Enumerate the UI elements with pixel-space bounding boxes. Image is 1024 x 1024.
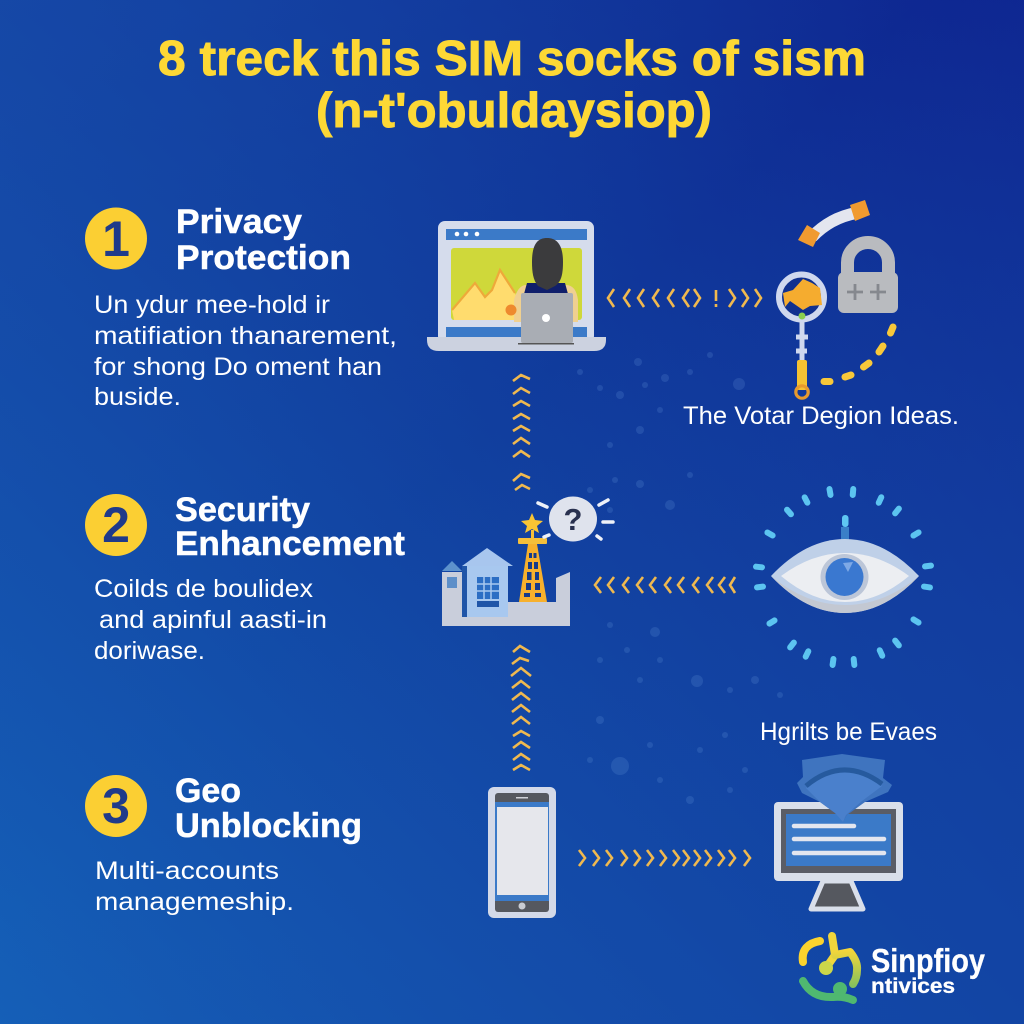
number badge 1: 1 bbox=[102, 211, 130, 267]
text block: security: Coilds de boulidex bbox=[94, 575, 314, 603]
text block: security bbox=[94, 575, 327, 665]
text block: geo bbox=[95, 857, 294, 916]
caption: highlights: Hgrilts be Evaes bbox=[760, 718, 937, 746]
icon: building, tower and question bubble bbox=[442, 496, 613, 626]
heading: geo unblocking: Unblocking bbox=[175, 807, 362, 845]
heading: privacy protection bbox=[176, 203, 351, 277]
logo bbox=[803, 936, 986, 1000]
icon: building, tower and question bubble: ? bbox=[564, 502, 582, 537]
heading: security enhancement: Security bbox=[175, 491, 310, 529]
heading: security enhancement: Enhancement bbox=[175, 525, 405, 563]
icon: padlock with magnifier key bbox=[779, 200, 898, 398]
title bbox=[158, 32, 866, 138]
text block: privacy: matifiation thanarement, bbox=[94, 322, 397, 350]
icon: smartphone bbox=[488, 787, 556, 918]
logo text: Sinpfioy bbox=[871, 942, 986, 979]
number badge 1 bbox=[85, 208, 147, 270]
icon: monitor with shield bbox=[774, 754, 903, 909]
logo text bbox=[871, 942, 986, 998]
heading: geo unblocking bbox=[175, 772, 362, 845]
heading: privacy protection: Protection bbox=[176, 239, 351, 277]
panel: geo unblocking bbox=[85, 772, 362, 916]
title: 8 treck this SIM socks of sism bbox=[158, 32, 866, 86]
text block: privacy bbox=[94, 291, 397, 411]
text block: geo: Multi-accounts bbox=[95, 857, 279, 885]
text block: privacy: Un ydur mee-hold ir bbox=[94, 291, 330, 319]
number badge 2: 2 bbox=[102, 497, 130, 553]
text block: privacy: buside. bbox=[94, 383, 181, 411]
icon: laptop with person bbox=[427, 221, 606, 351]
caption: voter region: The Votar Degion Ideas. bbox=[683, 402, 959, 430]
arrow: chevrons eye to building bbox=[595, 577, 735, 593]
panel: privacy protection bbox=[85, 203, 397, 411]
heading: security enhancement bbox=[175, 491, 405, 563]
arrow: chevrons phone to monitor bbox=[579, 850, 750, 866]
arrow: chevrons up from phone to building bbox=[511, 646, 531, 770]
title: (n-t'obuldaysiop) bbox=[316, 84, 712, 138]
number badge 3 bbox=[85, 775, 147, 837]
text block: security: and apinful aasti-in bbox=[99, 606, 327, 634]
heading: privacy protection: Privacy bbox=[176, 203, 302, 241]
text block: privacy: for shong Do oment han bbox=[94, 353, 382, 381]
number badge 3: 3 bbox=[102, 778, 130, 834]
arrow: chevrons up from building to laptop bbox=[513, 375, 530, 490]
panel: security enhancement bbox=[85, 491, 405, 665]
logo text: ntivices bbox=[871, 975, 955, 998]
logo mark bbox=[803, 936, 857, 1000]
number badge 2 bbox=[85, 494, 147, 556]
text block: geo: managemeship. bbox=[95, 888, 294, 916]
icon: eye with radiating ticks bbox=[753, 486, 934, 668]
text block: security: doriwase. bbox=[94, 637, 205, 665]
heading: geo unblocking: Geo bbox=[175, 772, 241, 810]
arrow: chevrons laptop to lock bbox=[608, 289, 761, 307]
